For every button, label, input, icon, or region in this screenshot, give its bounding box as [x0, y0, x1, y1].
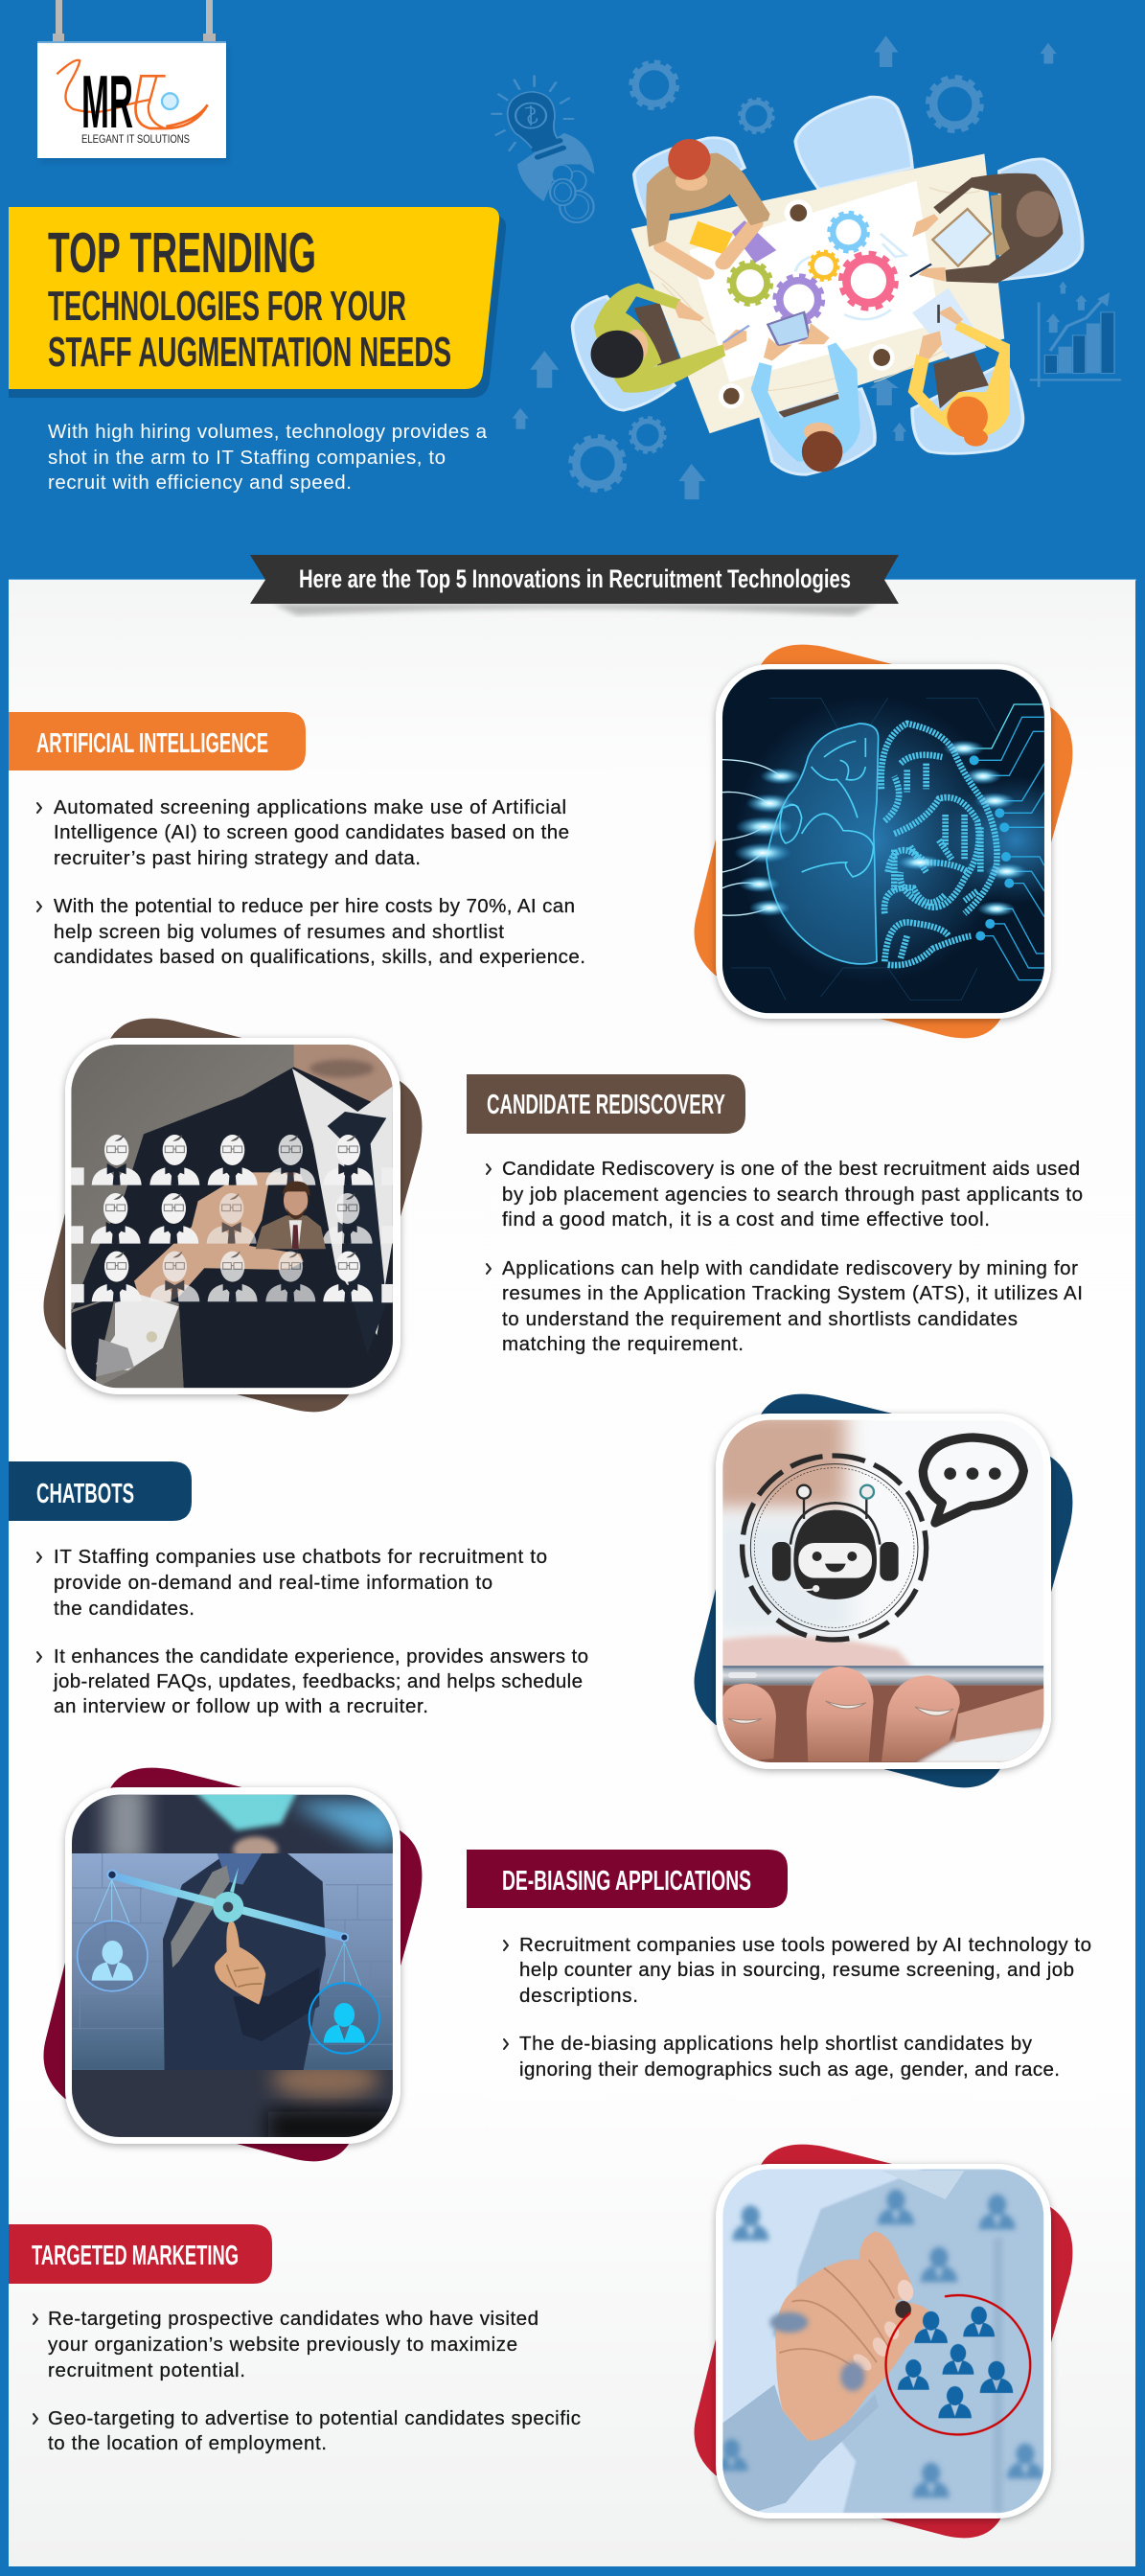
text: ai bullets — [37, 796, 585, 968]
text: de-biasing bullets: The de-biasing applications help shortlist candidates by — [519, 2033, 1033, 2055]
text: rediscovery bullets — [487, 1158, 1083, 1355]
text: chatbots bullets: the candidates. — [54, 1598, 195, 1620]
text: ai bullets: help screen big volumes of resumes and shortlist — [54, 921, 504, 943]
text: chatbots bullets: an interview or follow up with a recruiter. — [54, 1695, 428, 1717]
logo signboard: ELEGANT IT SOLUTIONS — [81, 132, 190, 146]
text: rediscovery bullets: find a good match, it is a cost and time effective tool. — [502, 1208, 990, 1230]
image: balance scale — [44, 1768, 422, 2161]
section: candidate rediscovery — [44, 1019, 1083, 1412]
text: de-biasing bullets — [504, 1934, 1091, 2081]
scale beam — [107, 1867, 348, 1942]
text: targeted marketing bullets: recruitment potential. — [48, 2359, 245, 2381]
notebooks — [689, 220, 776, 263]
chairs — [573, 97, 1083, 474]
chatbot ring — [743, 1456, 927, 1640]
label: targeted marketing: TARGETED MARKETING — [32, 2241, 239, 2271]
label: de-biasing applications: DE-BIASING APPLICATIONS — [502, 1866, 751, 1897]
label: de-biasing applications — [467, 1850, 788, 1908]
logo signboard — [37, 0, 229, 163]
text: de-biasing bullets: help counter any bias in sourcing, resume screening, and job — [519, 1959, 1074, 1981]
logo signboard: MR — [81, 59, 133, 144]
label: candidate rediscovery: CANDIDATE REDISCOVERY — [487, 1090, 725, 1120]
text: rediscovery bullets: by job placement agencies to search through past applicants to — [502, 1184, 1083, 1206]
label: targeted marketing — [9, 2224, 272, 2284]
title banner — [9, 207, 506, 398]
person: tan shirt — [646, 139, 770, 273]
scale hand — [215, 1920, 265, 2005]
sleeve — [722, 2384, 879, 2513]
red target circle — [886, 2295, 1030, 2434]
text: ai bullets: Intelligence (AI) to screen good candidates based on the — [54, 821, 569, 843]
ribbon heading: Here are the Top 5 Innovations in Recruitment Technologies — [299, 564, 851, 593]
speech bubble — [923, 1438, 1023, 1523]
title text — [48, 221, 451, 376]
section: chatbots — [9, 1394, 1072, 1787]
text: chatbots bullets: job-related FAQs, updates, feedbacks; and helps schedule — [53, 1670, 583, 1692]
image: hand picking candidate — [44, 1019, 422, 1412]
text: de-biasing bullets: ignoring their demographics such as age, gender, and race. — [519, 2058, 1060, 2081]
title text: TECHNOLOGIES FOR YOUR — [48, 283, 406, 330]
illustration: team at table with gears — [491, 35, 1121, 499]
icon: growth bar chart — [1030, 282, 1121, 387]
text: targeted marketing bullets: to the location of employment. — [48, 2432, 327, 2454]
intro paragraph — [48, 421, 488, 494]
icon: lightbulb rocket with coins — [491, 76, 595, 222]
scale pan: left person — [78, 1880, 148, 1991]
person: blue shirt — [751, 312, 860, 472]
section: targeted marketing — [9, 2145, 1072, 2538]
panel: white content sheet — [9, 579, 1136, 2566]
label: candidate rediscovery — [467, 1074, 745, 1134]
text: ai bullets: recruiter’s past hiring strategy and data. — [54, 847, 421, 869]
text: rediscovery bullets: matching the requirement. — [502, 1333, 744, 1355]
text: chatbots bullets — [37, 1546, 588, 1717]
hand with pen — [769, 2231, 929, 2441]
text: de-biasing bullets: Recruitment companies use tools powered by AI technology to — [519, 1934, 1091, 1956]
text: rediscovery bullets: to understand the requirement and shortlists candidates — [502, 1308, 1018, 1330]
person: green shirt — [591, 284, 749, 393]
image: chatbot over phone — [694, 1394, 1072, 1787]
background people — [715, 2190, 1043, 2497]
text: chatbots bullets: It enhances the candidate experience, provides answers to — [54, 1645, 588, 1668]
intro paragraph: shot in the arm to IT Staffing companies, to — [48, 447, 446, 469]
text: targeted marketing bullets: Re-targeting prospective candidates who have visited — [48, 2308, 538, 2330]
mini candidate portrait — [256, 1182, 326, 1249]
scale pan: right person — [309, 1943, 379, 2054]
table and paper — [631, 154, 1004, 433]
title text: STAFF AUGMENTATION NEEDS — [48, 329, 451, 376]
image: brain with circuits — [694, 645, 1089, 1038]
text: rediscovery bullets: Applications can help with candidate rediscovery by mining for — [502, 1257, 1078, 1279]
label: chatbots: CHATBOTS — [36, 1479, 134, 1509]
text: targeted marketing bullets: Geo-targeting to advertise to potential candidates specific — [48, 2407, 581, 2429]
table gears — [728, 213, 905, 324]
coffee cups — [719, 199, 894, 408]
intro paragraph: recruit with efficiency and speed. — [48, 472, 352, 494]
background icons: gears and arrows — [513, 35, 1057, 499]
text: chatbots bullets: provide on-demand and real-time information to — [54, 1572, 492, 1594]
label: artificial intelligence — [9, 712, 306, 770]
text: rediscovery bullets: Candidate Rediscovery is one of the best recruitment aids used — [502, 1158, 1080, 1180]
text: targeted marketing bullets: your organization’s website previously to maximize — [48, 2334, 517, 2356]
text: rediscovery bullets: resumes in the Application Tracking System (ATS), it utilizes AI — [502, 1282, 1083, 1304]
person: brown jacket — [910, 173, 1063, 284]
section: de-biasing applications — [44, 1768, 1091, 2161]
intro paragraph: With high hiring volumes, technology provides a — [48, 421, 488, 443]
text: targeted marketing bullets — [34, 2308, 581, 2454]
person: yellow shirt — [908, 288, 1010, 447]
text: ai bullets: Automated screening applications make use of Artificial — [54, 796, 566, 818]
label: chatbots — [9, 1461, 192, 1521]
target people in circle — [898, 2307, 1013, 2418]
image: hand circling target audience — [694, 2145, 1072, 2538]
text: de-biasing bullets: descriptions. — [519, 1985, 638, 2007]
text: chatbots bullets: IT Staffing companies use chatbots for recruitment to — [54, 1546, 547, 1568]
text: ai bullets: With the potential to reduce per hire costs by 70%, AI can — [54, 895, 575, 917]
ribbon heading — [250, 555, 899, 615]
title text: TOP TRENDING — [48, 221, 316, 285]
chatbot robot — [772, 1485, 899, 1599]
label: artificial intelligence: ARTIFICIAL INTELLIGENCE — [36, 728, 268, 759]
text: ai bullets: candidates based on qualifications, skills, and experience. — [54, 946, 585, 968]
section: artificial intelligence — [9, 645, 1089, 1038]
